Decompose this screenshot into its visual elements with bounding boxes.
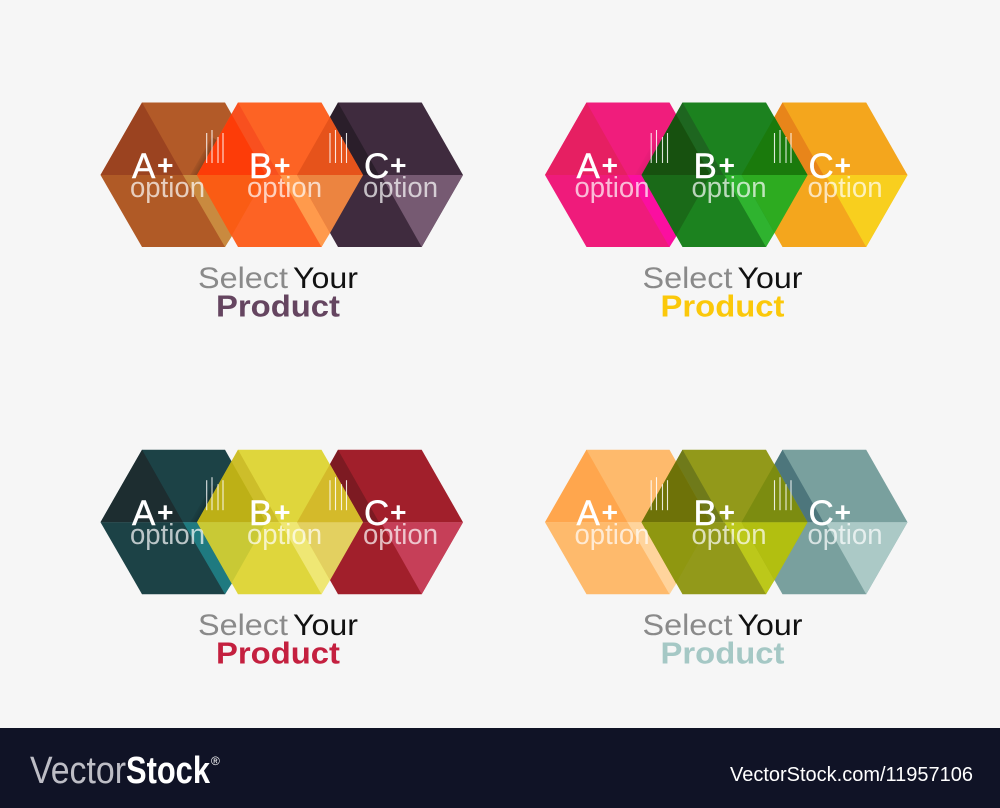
label C+ option: C: [808, 147, 834, 186]
label C+ option: option: [363, 172, 438, 204]
label C+ option: [363, 147, 438, 204]
label A+ option: A: [132, 147, 156, 186]
panel: teal and yellow option set: [100, 450, 463, 671]
label C+ option: +: [390, 150, 406, 180]
label A+ option: [574, 494, 650, 551]
label C+ option: +: [834, 150, 851, 180]
label B+ option: [692, 494, 766, 551]
hexagon B: [197, 102, 363, 247]
label B+ option: B: [249, 147, 272, 186]
label A+ option: option: [574, 519, 650, 551]
hexagon A: [100, 450, 266, 594]
hexagon C: [297, 102, 463, 247]
panel: pink and green option set: [545, 102, 908, 324]
hexagon A: [545, 102, 710, 247]
label B+ option: B: [249, 494, 272, 533]
label A+ option: option: [574, 172, 650, 204]
hexagon C: [742, 450, 908, 594]
heading: Select Your Product: Your: [293, 609, 358, 642]
footer bar: [0, 728, 1000, 808]
label B+ option: +: [274, 150, 290, 180]
heading: Select Your Product: [642, 262, 802, 324]
bars: small chart 1: [651, 477, 668, 510]
bars: small chart 1: [207, 477, 223, 510]
heading: Select Your Product: [642, 609, 802, 671]
label A+ option: +: [157, 150, 174, 180]
label A+ option: [130, 147, 205, 204]
hexagon A: [545, 450, 710, 594]
heading: Select Your Product: Your: [293, 262, 358, 295]
hexagon B: [642, 450, 808, 594]
label A+ option: A: [576, 494, 600, 533]
heading: Select Your Product: Select: [198, 262, 289, 295]
label C+ option: [363, 494, 438, 551]
heading: Select Your Product: Select: [198, 609, 289, 642]
bars: small chart 2: [330, 130, 346, 163]
label B+ option: B: [694, 147, 717, 186]
label C+ option: C: [364, 494, 389, 533]
label B+ option: B: [694, 494, 717, 533]
label B+ option: option: [247, 172, 322, 204]
label B+ option: +: [274, 497, 290, 528]
label A+ option: +: [602, 497, 618, 528]
heading: Select Your Product: Your: [738, 609, 802, 642]
label A+ option: A: [576, 147, 600, 186]
logo: VectorStock: [30, 750, 220, 792]
label C+ option: C: [808, 494, 834, 533]
heading: Select Your Product: Product: [216, 288, 340, 324]
heading: Select Your Product: Select: [642, 609, 733, 642]
label B+ option: option: [692, 519, 766, 551]
panel: orange and plum option set: [100, 102, 463, 324]
hexagon A: [100, 102, 266, 247]
bars: small chart 1: [207, 130, 223, 163]
label C+ option: +: [834, 497, 851, 528]
label A+ option: +: [602, 150, 618, 180]
label A+ option: A: [132, 494, 156, 533]
label B+ option: option: [692, 172, 766, 204]
heading: Select Your Product: Your: [738, 262, 802, 295]
bars: small chart 1: [651, 130, 668, 163]
label B+ option: [247, 494, 322, 551]
label A+ option: +: [157, 497, 174, 528]
image id: VectorStock.com/11957106: [730, 764, 973, 786]
hexagon C: [297, 450, 463, 594]
logo: VectorStock: Vector: [30, 750, 126, 792]
label C+ option: option: [808, 172, 882, 204]
label C+ option: option: [808, 519, 882, 551]
heading: Select Your Product: Product: [660, 636, 784, 671]
heading: Select Your Product: Product: [660, 288, 784, 324]
hexagon C: [742, 102, 908, 247]
label B+ option: option: [247, 519, 322, 551]
label B+ option: +: [718, 497, 735, 528]
hexagon B: [642, 102, 808, 247]
logo: VectorStock: Stock: [126, 750, 211, 792]
label C+ option: [808, 494, 882, 551]
label B+ option: [692, 147, 766, 204]
label C+ option: option: [363, 519, 438, 551]
bars: small chart 2: [330, 477, 346, 510]
label A+ option: option: [130, 172, 205, 204]
label C+ option: C: [364, 147, 389, 186]
label B+ option: [247, 147, 322, 204]
heading: Select Your Product: [198, 609, 358, 671]
label B+ option: +: [718, 150, 735, 180]
label C+ option: +: [390, 497, 406, 528]
label A+ option: option: [130, 519, 205, 551]
panel: peach and olive option set: [545, 450, 908, 671]
bars: small chart 2: [774, 477, 791, 510]
heading: Select Your Product: [198, 262, 358, 324]
label A+ option: [130, 494, 205, 551]
heading: Select Your Product: Select: [642, 262, 733, 295]
bars: small chart 2: [774, 130, 791, 163]
label A+ option: [574, 147, 650, 204]
heading: Select Your Product: Product: [216, 636, 340, 671]
hexagon B: [197, 450, 363, 594]
label C+ option: [808, 147, 882, 204]
logo: VectorStock: ®: [211, 754, 220, 768]
